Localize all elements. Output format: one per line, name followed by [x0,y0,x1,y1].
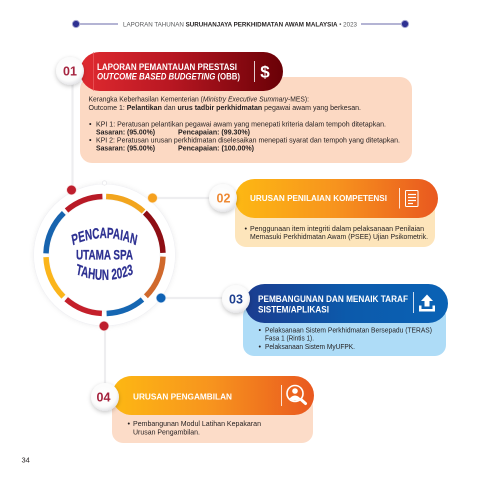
connector lines [72,84,224,385]
number badge 04 [91,383,119,411]
panel: 03: SISTEM/APLIKASI [258,304,329,314]
text: panel 02 body: Memasuki Perkhidmatan Awam (PSEE) Ujian Psikometrik. [250,232,428,241]
panel: 02: URUSAN PENILAIAN KOMPETENSI [250,193,387,203]
text: panel 03 body [258,326,432,351]
panel: 03 [243,284,448,356]
text: panel 02 body [244,224,428,241]
number badge 02: 02 [217,192,230,206]
text: panel 01 KPI list [89,120,400,152]
panel: 01 header pill: OUTCOME BASED BUDGETING (OBB) [97,72,240,82]
central ring [33,180,176,331]
number badge 02 [209,184,237,212]
text: panel 01 KPI list: Pencapaian: (99.30%) [178,128,251,136]
text: panel 01 KPI list: Sasaran: (95.00%) [96,128,156,136]
icon: upload [419,294,435,312]
text: panel 01 intro: Outcome 1: Pelantikan dan urus tadbir perkhidmatan pegawai awam yang berkesan. [88,103,361,112]
text: panel 01 intro [88,94,361,112]
ring segments [22,172,187,338]
page number: 34 [22,456,30,464]
ring title: UTAMA SPA [76,246,133,262]
number badge 03 [222,285,250,313]
text: panel 04 body [128,419,261,436]
text: panel 01 KPI list: Sasaran: (95.00%) [96,144,156,152]
text: panel 01 KPI list: • [89,136,92,144]
header [72,20,409,28]
number badge 03: 03 [229,292,243,306]
text: panel 02 body: Penggunaan item integriti dalam pelaksanaan Penilaian [250,224,424,233]
number badge 04: 04 [97,390,110,404]
text: panel 03 body: • [258,326,262,334]
number badge 01: 01 [63,64,77,78]
ring dots [67,181,166,331]
ring title: TAHUN 2023 [77,264,133,280]
panel: 04 [112,376,314,443]
text: panel 03 body: Pelaksanaan Sistem MyUFPK. [265,342,355,351]
icon: dollar: $ [260,62,270,82]
text: panel 01 intro: Kerangka Keberhasilan Kementerian (Ministry Executive Summary-MES): [88,94,309,104]
text: panel 03 body: • [258,342,262,351]
text: panel 01 KPI list: KPI 2: Peratusan urusan perkhidmatan diselesaikan menepati syarat dan tempoh yang ditetapkan. [96,136,400,144]
header: LAPORAN TAHUNAN SURUHANJAYA PERKHIDMATAN AWAM MALAYSIA • 2023 [123,21,358,28]
icon: document [406,190,418,206]
panel: 01 body [80,77,412,163]
text: panel 01 KPI list: Pencapaian: (100.00%) [178,144,255,152]
panel: 01 header pill: LAPORAN PEMANTAUAN PRESTASI [97,62,237,72]
panel: 01 header pill [80,52,283,91]
text: panel 03 body: Pelaksanaan Sistem Perkhidmatan Bersepadu (TERAS) [265,326,432,334]
ring title [71,228,138,280]
text: panel 02 body: • [244,224,248,233]
panel: 04: URUSAN PENGAMBILAN [133,392,232,402]
panel: 02 [235,179,438,247]
text: panel 01 KPI list: • [89,120,92,128]
text: panel 04 body: Pembangunan Modul Latihan Kepakaran [133,419,261,428]
text: panel 04 body: Urusan Pengambilan. [133,428,200,436]
panel: 03: PEMBANGUNAN DAN MENAIK TARAF [258,294,409,304]
text: panel 01 KPI list: KPI 1: Peratusan pelantikan pegawai awam yang menepati kriteria dalam tempoh ditetapkan. [96,120,386,128]
number badge 01 [56,57,84,85]
ring title: PENCAPAIAN [71,228,138,246]
text: panel 04 body: • [128,419,130,428]
text: panel 03 body: Fasa 1 (Rintis 1). [265,334,314,342]
icon: magnifier [287,386,306,404]
